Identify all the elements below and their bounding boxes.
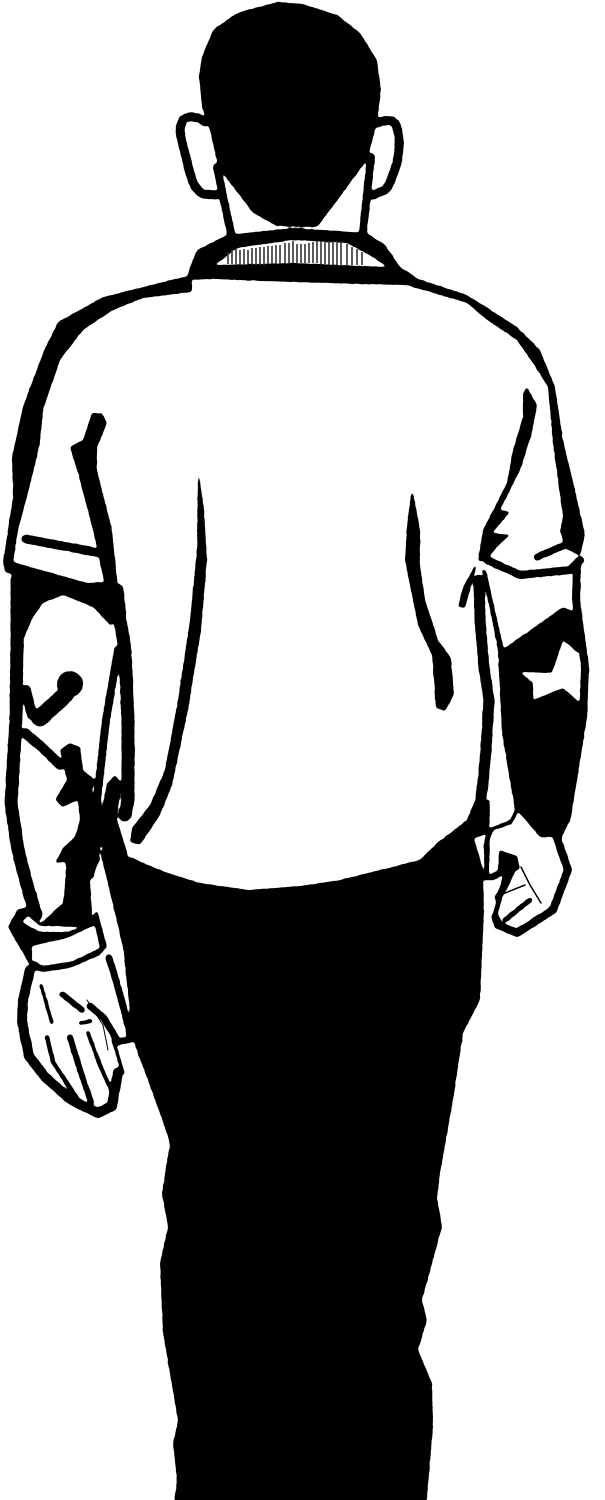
trousers bbox=[100, 820, 484, 1500]
right hand detail bbox=[498, 866, 530, 920]
left ear and neck bbox=[180, 117, 231, 234]
collar bbox=[186, 228, 420, 285]
left arm tattoo bbox=[25, 671, 100, 925]
left sleeve bbox=[3, 413, 118, 640]
head bbox=[199, 2, 381, 227]
right sleeve bbox=[458, 387, 580, 608]
left cuff bbox=[8, 906, 107, 972]
right arm bbox=[467, 565, 585, 933]
thin hand sketch lines bbox=[87, 867, 541, 1050]
right ear and neck bbox=[363, 121, 399, 232]
left shoulder outline bbox=[3, 275, 192, 563]
collar hatching bbox=[228, 241, 362, 265]
right arm star tattoo bbox=[502, 607, 585, 837]
right torso crease bbox=[405, 488, 454, 711]
left arm bbox=[11, 580, 128, 915]
left torso crease bbox=[130, 467, 207, 845]
right shoulder outline bbox=[400, 273, 585, 556]
left hand bbox=[22, 958, 131, 1113]
